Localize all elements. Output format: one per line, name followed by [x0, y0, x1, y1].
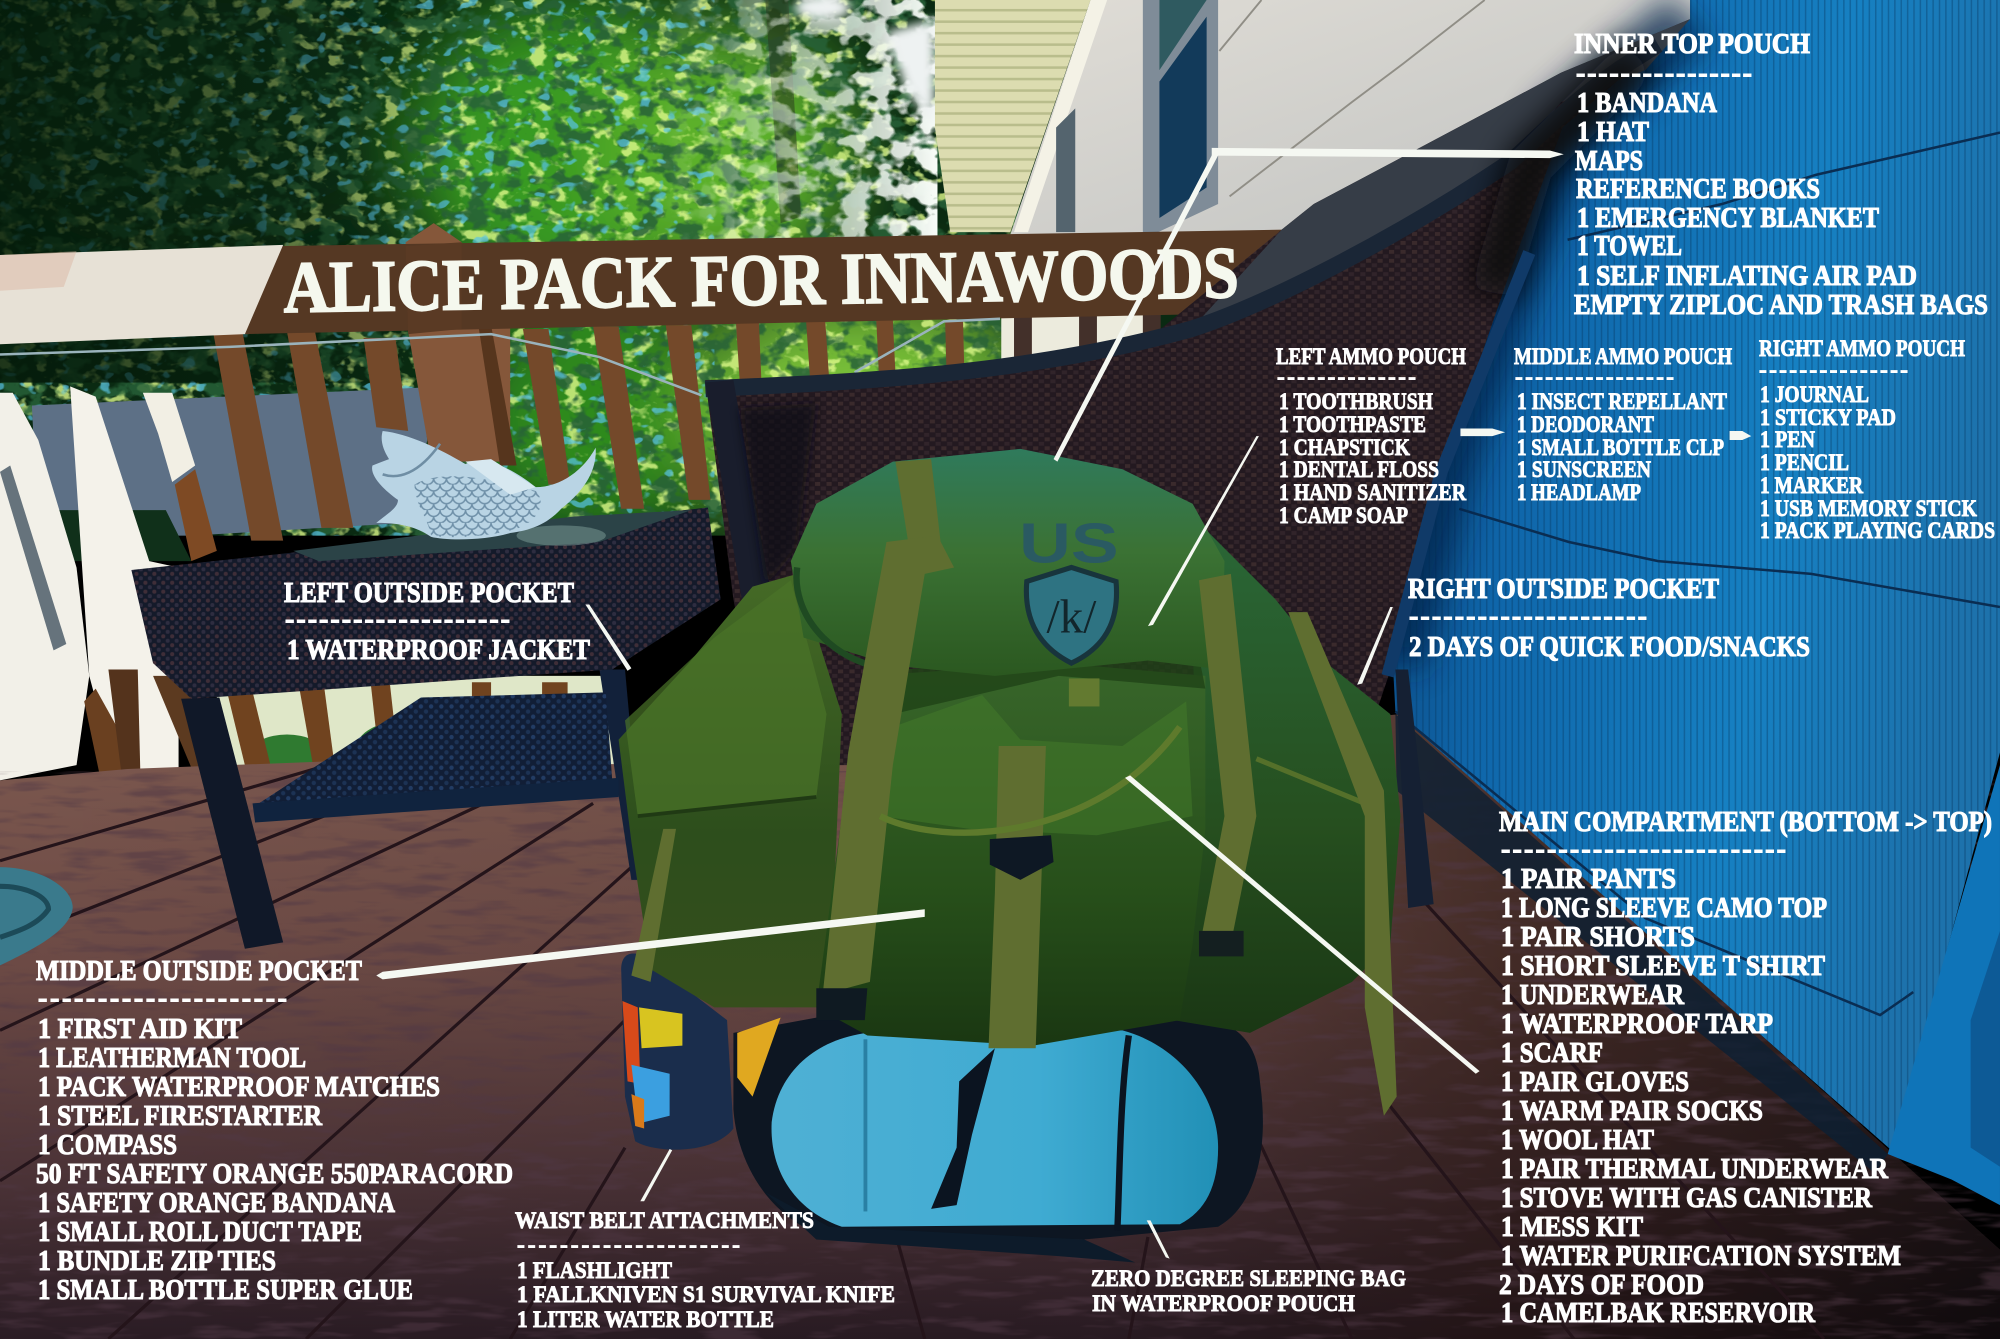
list: inner top pouch items: 1 TOWEL	[1577, 231, 1682, 262]
backpack right pouch	[1173, 510, 1400, 1033]
backpack front pocket	[816, 657, 1205, 1046]
list: main compartment items: 1 PAIR PANTS	[1501, 864, 1676, 895]
heading: middle ammo pouch: MIDDLE AMMO POUCH	[1514, 344, 1732, 370]
list: waist belt items: 1 FALLKNIVEN S1 SURVIVAL KNIFE	[517, 1282, 895, 1308]
list: middle outside pocket items: 1 COMPASS	[38, 1130, 177, 1161]
heading: waist belt attachments: WAIST BELT ATTACHMENTS	[515, 1208, 814, 1234]
divider dashes: -------------------------	[1501, 834, 1786, 865]
divider dashes: ----------------	[1576, 58, 1752, 89]
list: middle outside pocket items: 1 SMALL ROLL DUCT TAPE	[38, 1217, 362, 1248]
arrow: left to middle ammo pouch	[1460, 428, 1505, 436]
list: inner top pouch items: 1 HAT	[1577, 117, 1649, 148]
list: main compartment items: 1 WARM PAIR SOCKS	[1501, 1096, 1763, 1127]
item: quick food: 2 DAYS OF QUICK FOOD/SNACKS	[1409, 632, 1810, 663]
green backpack	[619, 449, 1400, 1116]
block: sleeping bag: ZERO DEGREE SLEEPING BAG	[1091, 1266, 1406, 1292]
list: main compartment items: 1 WOOL HAT	[1501, 1125, 1654, 1156]
heading: right outside pocket: RIGHT OUTSIDE POCKET	[1408, 574, 1719, 605]
list: middle outside pocket items: 1 LEATHERMAN TOOL	[38, 1043, 306, 1074]
divider dashes: ---------------------	[38, 983, 287, 1014]
line: left outside pocket	[585, 604, 631, 671]
clothesline wire	[0, 319, 1000, 395]
list: middle outside pocket items: 1 SMALL BOTTLE SUPER GLUE	[38, 1275, 413, 1306]
list: middle outside pocket items: 1 STEEL FIRESTARTER	[38, 1101, 323, 1132]
heading: middle outside pocket: MIDDLE OUTSIDE POCKET	[36, 956, 362, 987]
list: middle outside pocket items: 50 FT SAFETY ORANGE 550PARACORD	[36, 1159, 513, 1190]
heading: left ammo pouch: LEFT AMMO POUCH	[1276, 344, 1466, 370]
list: right ammo pouch items: 1 PENCIL	[1760, 450, 1849, 476]
list: left ammo pouch items: 1 CAMP SOAP	[1279, 503, 1408, 529]
backpack top flap	[791, 449, 1224, 676]
list: middle ammo pouch items: 1 SMALL BOTTLE CLP	[1517, 435, 1724, 461]
list: left ammo pouch items: 1 TOOTHPASTE	[1279, 412, 1426, 438]
block: right outside pocket	[1408, 574, 1810, 663]
list: main compartment items: 2 DAYS OF FOOD	[1499, 1270, 1704, 1301]
list: main compartment items: 1 WATERPROOF TARP	[1501, 1009, 1773, 1040]
sleeping bag	[733, 1014, 1263, 1262]
divider dashes: --------------	[1277, 364, 1416, 390]
list: left ammo pouch items: 1 DENTAL FLOSS	[1279, 457, 1439, 483]
list: middle outside pocket items: 1 BUNDLE ZIP TIES	[38, 1246, 276, 1277]
list: right ammo pouch items: 1 MARKER	[1760, 473, 1864, 499]
list: right ammo pouch items	[1760, 382, 1995, 544]
list: inner top pouch items: 1 SELF INFLATING AIR PAD	[1577, 261, 1917, 292]
backpack k patch: /k/	[1047, 592, 1097, 643]
divider dashes: --------------------	[285, 604, 510, 635]
list: main compartment items: 1 UNDERWEAR	[1501, 980, 1685, 1011]
list: inner top pouch items: MAPS	[1575, 146, 1643, 177]
fish figurine	[372, 431, 596, 539]
grey fence in background	[32, 388, 427, 536]
post	[406, 223, 517, 465]
wicker chair	[705, 19, 1690, 908]
side table	[131, 508, 721, 949]
block: sleeping bag: IN WATERPROOF POUCH	[1092, 1291, 1355, 1317]
backpack buckle	[990, 835, 1054, 880]
list: middle ammo pouch items: 1 INSECT REPELLANT	[1517, 389, 1727, 415]
line: inner top pouch	[1054, 148, 1564, 462]
block: right ammo pouch	[1759, 336, 1995, 544]
list: main compartment items: 1 WATER PURIFCATION SYSTEM	[1501, 1241, 1901, 1272]
list: left ammo pouch items: 1 TOOTHBRUSH	[1279, 389, 1433, 415]
block: waist belt attachments	[515, 1208, 895, 1333]
callout lines	[376, 148, 1751, 1259]
list: middle ammo pouch items	[1517, 389, 1727, 506]
list: main compartment items: 1 SHORT SLEEVE T SHIRT	[1501, 951, 1825, 982]
list: waist belt items	[517, 1258, 895, 1333]
house wall	[935, 0, 1696, 383]
water bottle	[621, 953, 733, 1150]
list: middle outside pocket items	[36, 1014, 513, 1306]
list: right ammo pouch items: 1 STICKY PAD	[1760, 405, 1896, 431]
backpack straps	[631, 459, 1397, 1116]
line: waist belt attachments	[640, 1149, 672, 1201]
list: middle outside pocket items: 1 PACK WATERPROOF MATCHES	[38, 1072, 440, 1103]
line: middle outside pocket	[376, 909, 925, 979]
list: right ammo pouch items: 1 PEN	[1760, 427, 1815, 453]
list: main compartment items: 1 PAIR THERMAL UNDERWEAR	[1501, 1154, 1889, 1185]
list: main compartment items: 1 MESS KIT	[1501, 1212, 1643, 1243]
block: left ammo pouch	[1276, 344, 1467, 529]
divider dashes: ---------------------	[1409, 601, 1647, 632]
list: main compartment items: 1 LONG SLEEVE CAMO TOP	[1501, 893, 1827, 924]
list: left ammo pouch items: 1 CHAPSTICK	[1279, 435, 1411, 461]
list: waist belt items: 1 FLASHLIGHT	[517, 1258, 672, 1284]
divider dashes: ---------------------	[517, 1232, 740, 1258]
item: waterproof jacket: 1 WATERPROOF JACKET	[287, 635, 590, 666]
backpack left pouch	[619, 574, 842, 1007]
white picket fence	[0, 386, 217, 780]
divider dashes: ----------------	[1515, 364, 1674, 390]
blue shingle wall	[1393, 0, 2000, 1205]
list: main compartment items: 1 PAIR GLOVES	[1501, 1067, 1689, 1098]
list: middle ammo pouch items: 1 SUNSCREEN	[1517, 457, 1651, 483]
list: left ammo pouch items: 1 HAND SANITIZER	[1279, 480, 1467, 506]
railing with title board	[0, 230, 1291, 344]
block: middle outside pocket	[36, 956, 513, 1306]
garden hose coil	[0, 867, 73, 965]
wooden deck	[0, 714, 2000, 1339]
title: ALICE PACK FOR INNAWOODS	[283, 232, 1239, 328]
line: main compartment	[1125, 775, 1480, 1074]
divider dashes: ---------------	[1759, 357, 1908, 383]
list: right ammo pouch items: 1 JOURNAL	[1760, 382, 1869, 408]
foliage and sky	[0, 0, 1178, 536]
block: left outside pocket	[284, 578, 590, 666]
list: middle ammo pouch items: 1 HEADLAMP	[1517, 480, 1641, 506]
line: left ammo pouch	[1148, 436, 1259, 626]
block: middle ammo pouch	[1514, 344, 1732, 506]
list: middle outside pocket items: 1 SAFETY ORANGE BANDANA	[38, 1188, 396, 1219]
line: sleeping bag	[1147, 1220, 1170, 1259]
list: main compartment items: 1 PAIR SHORTS	[1501, 922, 1695, 953]
list: main compartment items: 1 CAMELBAK RESERVOIR	[1501, 1298, 1816, 1329]
list: main compartment items	[1499, 864, 1901, 1329]
block: inner top pouch	[1574, 29, 1988, 321]
list: middle outside pocket items: 1 FIRST AID KIT	[38, 1014, 242, 1045]
balusters	[213, 311, 1161, 541]
heading: inner top pouch: INNER TOP POUCH	[1574, 29, 1810, 60]
heading: left outside pocket: LEFT OUTSIDE POCKET	[284, 578, 574, 609]
block: main compartment	[1499, 807, 1992, 1329]
list: main compartment items: 1 SCARF	[1501, 1038, 1603, 1069]
list: waist belt items: 1 LITER WATER BOTTLE	[517, 1307, 774, 1333]
list: inner top pouch items	[1574, 88, 1988, 321]
list: left ammo pouch items	[1279, 389, 1467, 529]
backpack k patch	[1026, 567, 1117, 663]
block: sleeping bag	[1091, 1266, 1406, 1317]
line: right outside pocket	[1357, 607, 1393, 685]
arrow: middle to right ammo pouch	[1730, 431, 1751, 440]
list: middle ammo pouch items: 1 DEODORANT	[1517, 412, 1654, 438]
list: inner top pouch items: 1 EMERGENCY BLANKET	[1577, 203, 1879, 234]
list: main compartment items: 1 STOVE WITH GAS CANISTER	[1501, 1183, 1873, 1214]
list: inner top pouch items: 1 BANDANA	[1577, 88, 1718, 119]
backpack US marking: US	[1019, 511, 1119, 574]
window	[1143, 0, 1218, 232]
balusters under table	[217, 676, 625, 774]
list: inner top pouch items: REFERENCE BOOKS	[1576, 174, 1820, 205]
